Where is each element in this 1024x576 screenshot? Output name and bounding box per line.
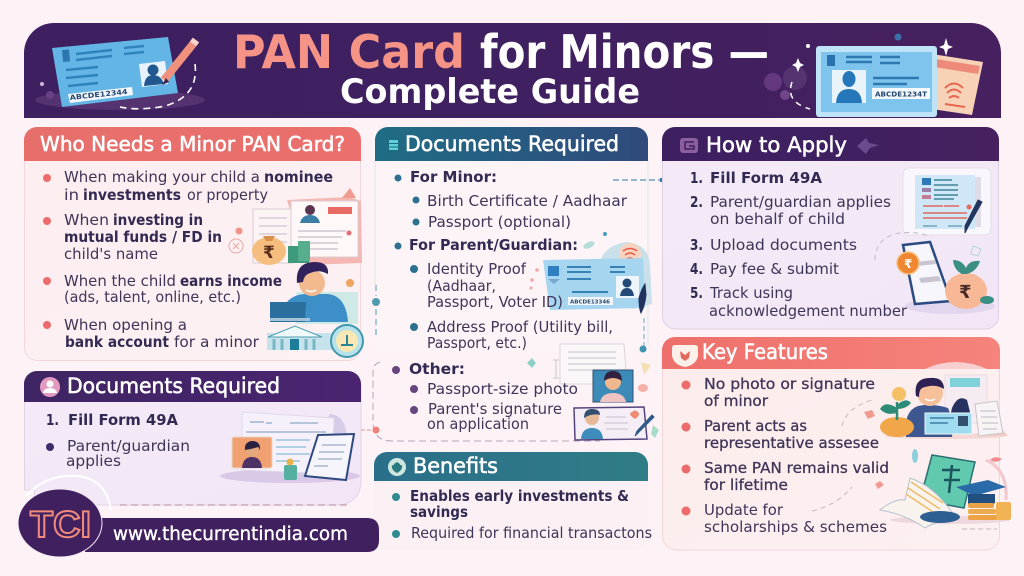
- connector: documents to how to apply: [613, 178, 668, 182]
- list: how to apply: 5.: [690, 284, 703, 302]
- dashed accent: [962, 528, 997, 530]
- bullet list: who needs: or property: [187, 186, 268, 204]
- panel header: how to apply: [662, 127, 999, 161]
- list: documents middle: (Aadhaar,: [427, 277, 496, 295]
- list: key features: Update for: [704, 501, 784, 519]
- list: documents middle: on application: [427, 415, 529, 433]
- title: Complete Guide: [340, 72, 640, 112]
- list: how to apply: acknowledgement number: [709, 302, 908, 320]
- bullet list: who needs: child's name: [64, 245, 158, 263]
- bullet list: who needs: in: [64, 186, 79, 204]
- list: documents middle: Birth Certificate / Aadhaar: [427, 192, 628, 210]
- list: documents middle: Passport, etc.): [427, 334, 527, 352]
- bullet list: who needs: [43, 168, 333, 351]
- list: how to apply: Track using: [709, 284, 793, 302]
- list: key features: of minor: [704, 392, 769, 410]
- list: how to apply: 3.: [690, 236, 703, 254]
- panel header: key features: [662, 337, 1000, 369]
- bullet list: who needs: for a minor: [174, 333, 260, 351]
- bullet list: who needs: nominee: [264, 168, 333, 186]
- list: documents left: Fill Form 49A: [68, 411, 178, 429]
- list: how to apply: Parent/guardian applies: [710, 193, 891, 211]
- icon: arrow diamond: [857, 138, 879, 154]
- title: [233, 25, 769, 112]
- illustration: boy with PAN card and plant: [842, 362, 1008, 439]
- panel: documents required left: [24, 371, 361, 505]
- list: documents left: Parent/guardian: [67, 437, 190, 455]
- icon: ID card with fingerprint: ABCDE1234T: [875, 90, 927, 98]
- illustration: phone, coin and money bag: ₹: [904, 257, 912, 271]
- list: how to apply: 1.: [690, 169, 703, 187]
- list: how to apply: 2.: [690, 193, 703, 211]
- header banner: [24, 23, 1001, 118]
- illustration: boy with laptop and bank: [267, 262, 363, 357]
- bullet list: who needs: When opening a: [64, 316, 187, 334]
- panel: how to apply: [662, 127, 999, 329]
- panel: benefits: [374, 452, 652, 550]
- heading: who needs: Who Needs a Minor PAN Card?: [40, 132, 345, 156]
- list: how to apply: Pay fee & submit: [710, 260, 839, 278]
- website bar: [85, 518, 379, 552]
- connector: left column to middle: [372, 285, 380, 335]
- bullet list: who needs: investments: [83, 186, 181, 204]
- bullet list: who needs: (ads, talent, online, etc.): [64, 288, 241, 306]
- illustration: form, photo and tablet: [220, 412, 360, 483]
- icon: person badge: [40, 377, 60, 397]
- list: documents middle: Address Proof (Utility bill,: [427, 318, 613, 336]
- panel header: who needs: [24, 127, 361, 161]
- heading: benefits: Benefits: [413, 454, 498, 478]
- bullet list: who needs: earns income: [180, 272, 282, 290]
- icon: PAN card with pencil: ABCDE12344: [69, 88, 128, 102]
- heading: key features: Key Features: [702, 340, 828, 364]
- title: for Minors —: [480, 25, 769, 79]
- list: how to apply: on behalf of child: [710, 210, 845, 228]
- list: key features: Parent acts as: [704, 417, 807, 435]
- icon: list square: [389, 140, 398, 150]
- list: documents middle: For Parent/Guardian:: [409, 236, 578, 254]
- list: how to apply: [690, 169, 908, 320]
- list: benefits: [392, 487, 652, 542]
- list: documents middle: Passport, Voter ID): [427, 293, 563, 311]
- bullet list: who needs: When making your child a: [64, 168, 260, 186]
- list: documents middle: Other:: [409, 360, 465, 378]
- list: benefits: Required for financial transactons: [411, 524, 652, 542]
- list: documents middle: [392, 168, 628, 433]
- panel: documents required middle: [373, 127, 659, 441]
- heading: how to apply: How to Apply: [706, 133, 847, 157]
- list: key features: scholarships & schemes: [704, 518, 887, 536]
- icon: PAN card with pencil: [35, 37, 205, 110]
- website bar: www.thecurrentindia.com: [113, 524, 348, 545]
- panel header: benefits: [374, 452, 648, 481]
- list: key features: No photo or signature: [704, 375, 875, 393]
- list: how to apply: 4.: [690, 260, 703, 278]
- connector: form illustration to other: [361, 426, 380, 434]
- icon: shield badge: [672, 345, 698, 367]
- list: documents middle: Parent's signature: [428, 400, 562, 418]
- list: how to apply: Upload documents: [710, 236, 857, 254]
- list: documents left: 1.: [46, 411, 59, 429]
- illustration: phone, coin and money bag: ₹: [959, 282, 972, 303]
- list: key features: Same PAN remains valid: [704, 459, 889, 477]
- logo: TCI: TCI: [30, 504, 91, 545]
- bullet list: who needs: mutual funds / FD in: [64, 228, 222, 246]
- panel: key features: [662, 337, 1011, 550]
- icon: form badge: [680, 138, 698, 153]
- list: documents left: [46, 411, 190, 470]
- list: benefits: Enables early investments &: [410, 487, 629, 505]
- list: benefits: savings: [410, 503, 468, 521]
- illustration: book, tablet, graduation cap and coins: [812, 449, 1011, 528]
- illustration: documents and money bag: [229, 188, 362, 265]
- icon: ID card with fingerprint: [764, 34, 983, 117]
- title: PAN Card: [233, 25, 465, 79]
- icon: leaf badge: [388, 458, 406, 476]
- list: documents left: applies: [66, 452, 121, 470]
- illustration: form with pen: [903, 168, 991, 235]
- bullet list: who needs: investing in: [113, 211, 203, 229]
- list: documents middle: Identity Proof: [427, 260, 527, 278]
- panel: who needs a minor PAN card: [24, 127, 363, 360]
- panel header: documents middle: [375, 127, 648, 161]
- heading: documents left: Documents Required: [67, 374, 280, 398]
- panel header: documents left: [24, 371, 361, 402]
- list: key features: representative assesee: [704, 434, 879, 452]
- illustration: documents and money bag: ₹: [263, 243, 275, 263]
- bullet list: who needs: When: [64, 211, 109, 229]
- list: how to apply: Fill Form 49A: [710, 169, 822, 187]
- illustration: ID card with pen: [530, 232, 652, 313]
- list: key features: [682, 375, 889, 536]
- list: documents middle: For Minor:: [410, 168, 497, 186]
- bullet list: who needs: When the child: [64, 272, 176, 290]
- connector: right of middle column: [640, 318, 646, 352]
- list: documents middle: Passport-size photo: [427, 380, 578, 398]
- list: key features: for lifetime: [704, 476, 788, 494]
- list: documents middle: Passport (optional): [428, 213, 571, 231]
- illustration: ID card with pen: ABCDE13346: [570, 300, 611, 306]
- illustration: photo and signature cards: [527, 344, 659, 440]
- bullet list: who needs: bank account: [65, 333, 170, 351]
- heading: documents middle: Documents Required: [405, 132, 619, 156]
- logo: TCI: [18, 476, 379, 557]
- illustration: phone, coin and money bag: [875, 232, 995, 314]
